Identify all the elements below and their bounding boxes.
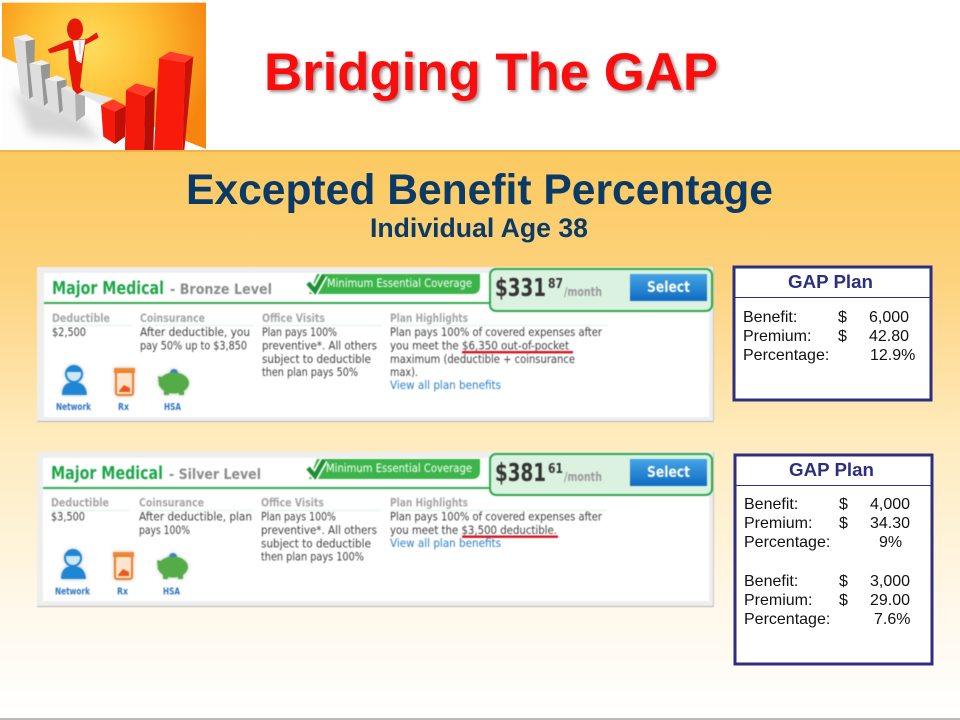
column: deductible <box>51 496 131 524</box>
premium row: 42.80 <box>869 328 909 345</box>
column: plan highlights: Plan Highlights <box>390 311 468 325</box>
column: deductible: Deductible <box>52 311 110 325</box>
title: Bridging The GAP <box>264 43 718 102</box>
column: office visits: subject to deductible <box>262 352 371 366</box>
background panel <box>0 150 960 720</box>
column: office visits: then plan pays 50% <box>262 365 358 379</box>
column: coinsurance: Coinsurance <box>139 496 204 510</box>
illustration: figure balancing across bars <box>2 3 206 150</box>
select button <box>630 459 707 486</box>
price box <box>490 454 712 495</box>
premium row: Premium: <box>743 328 811 345</box>
panel: bronze plan card <box>37 267 714 422</box>
option 2 premium row: Premium: <box>744 592 812 609</box>
option 2 benefit row: $ <box>839 573 848 590</box>
column: office visits: Plan pays 100% <box>262 325 337 339</box>
column: office visits: preventive*. All others <box>261 523 377 537</box>
benefit row: 6,000 <box>869 309 909 326</box>
icon: HSA piggy bank: HSA <box>164 402 181 413</box>
column: plan highlights: View all plan benefits <box>390 378 501 392</box>
select button: Select <box>647 278 690 296</box>
column: coinsurance <box>139 496 253 537</box>
icon: prescription bottle: Rx <box>117 586 128 598</box>
option 1 premium row: $ <box>839 515 848 532</box>
panel: GAP plan box 2: GAP Plan <box>789 459 874 480</box>
benefit row: Benefit: <box>743 309 797 326</box>
benefit row: $ <box>838 309 847 326</box>
subheading: Individual Age 38 <box>370 213 588 243</box>
column: coinsurance: After deductible, plan <box>139 510 252 524</box>
icon: prescription bottle <box>114 368 135 413</box>
panel: GAP plan box 2 <box>735 455 932 664</box>
premium row: $ <box>838 328 847 345</box>
icon: network doctor <box>55 550 91 598</box>
column: coinsurance: Coinsurance <box>140 311 205 325</box>
coverage badge: Minimum Essential Coverage <box>326 461 472 475</box>
column: plan highlights: you meet the $6,350 out-of-pocket <box>390 338 569 352</box>
plan name: - Silver Level <box>169 467 261 483</box>
option 2 benefit row <box>744 573 910 590</box>
column: plan highlights: maximum (deductible + coinsurance <box>390 352 575 366</box>
plan name: Major Medical <box>52 279 164 299</box>
column: coinsurance: pay 50% up to $3,850 <box>140 338 247 352</box>
select button: Select <box>647 463 690 481</box>
percentage row: 12.9% <box>870 347 915 364</box>
option 1 benefit row: $ <box>839 496 848 513</box>
icon: network doctor: Network <box>56 402 92 413</box>
figure <box>48 18 99 94</box>
column: office visits: subject to deductible <box>261 536 371 550</box>
price box: /month <box>564 470 602 484</box>
option 2 premium row <box>744 592 910 609</box>
option 2 premium row: $ <box>839 592 848 609</box>
plan name: - Bronze Level <box>170 282 272 298</box>
coverage badge <box>308 274 480 294</box>
column: office visits: preventive*. All others <box>262 338 377 352</box>
icon: HSA piggy bank <box>158 369 189 413</box>
icon: prescription bottle: Rx <box>118 402 129 413</box>
premium row <box>743 328 909 345</box>
column: plan highlights: Plan Highlights <box>390 496 468 510</box>
percentage row <box>743 347 915 364</box>
price box: /month <box>564 285 602 299</box>
plan name <box>51 464 261 484</box>
column: deductible <box>52 311 132 339</box>
option 2 percentage row <box>744 611 910 628</box>
column: coinsurance: pays 100% <box>139 523 190 537</box>
plan name <box>52 279 272 299</box>
option 1 premium row <box>744 515 910 532</box>
column: deductible: Deductible <box>51 496 109 510</box>
column: plan highlights: Plan pays 100% of covered expenses after <box>390 325 602 339</box>
option 2 percentage row: 7.6% <box>874 611 910 628</box>
option 1 premium row: Premium: <box>744 515 812 532</box>
panel: silver plan card <box>37 452 714 607</box>
panel: GAP plan box 1 <box>734 267 931 400</box>
column: plan highlights: View all plan benefits <box>390 536 501 550</box>
benefit row <box>743 309 909 326</box>
price box: $331 <box>495 273 546 302</box>
column: office visits: Plan pays 100% <box>261 510 336 524</box>
option 2 benefit row: Benefit: <box>744 573 798 590</box>
heading: Excepted Benefit Percentage <box>186 166 773 214</box>
column: office visits <box>261 496 381 564</box>
icon: network doctor <box>56 366 92 413</box>
icon: HSA piggy bank: HSA <box>163 586 180 598</box>
column: plan highlights <box>390 496 607 550</box>
price box: 61 <box>548 462 563 477</box>
option 2 percentage row: Percentage: <box>744 611 830 628</box>
select button <box>630 274 707 301</box>
option 1 benefit row: 4,000 <box>870 496 910 513</box>
plan name: Major Medical <box>51 464 163 484</box>
price box: 87 <box>548 277 563 292</box>
column: plan highlights <box>390 311 608 392</box>
icon: prescription bottle <box>113 552 134 598</box>
option 1 benefit row: Benefit: <box>744 496 798 513</box>
column: plan highlights: Plan pays 100% of covered expenses after <box>390 510 602 524</box>
coverage badge: Minimum Essential Coverage <box>327 276 472 290</box>
option 1 percentage row: Percentage: <box>744 534 830 551</box>
option 1 premium row: 34.30 <box>870 515 910 532</box>
column: plan highlights: max). <box>390 365 418 379</box>
icon: HSA piggy bank <box>157 553 188 598</box>
option 2 benefit row: 3,000 <box>870 573 910 590</box>
option 1 percentage row: 9% <box>879 534 902 551</box>
column: coinsurance <box>140 311 254 352</box>
column: office visits: then plan pays 100% <box>261 550 364 564</box>
icon: network doctor: Network <box>55 586 91 598</box>
coverage badge <box>308 459 480 479</box>
column: office visits <box>262 311 382 379</box>
option 1 benefit row <box>744 496 910 513</box>
price box <box>490 269 712 311</box>
price box: $381 <box>495 458 546 487</box>
percentage row: Percentage: <box>743 347 829 364</box>
column: office visits: Office Visits <box>262 311 325 325</box>
panel: GAP plan box 1: GAP Plan <box>788 271 873 292</box>
column: deductible: $2,500 <box>52 325 86 339</box>
option 2 premium row: 29.00 <box>870 592 910 609</box>
column: plan highlights: you meet the $3,500 deductible. <box>390 523 557 537</box>
option 1 percentage row <box>744 534 902 551</box>
column: deductible: $3,500 <box>51 510 85 524</box>
column: coinsurance: After deductible, you <box>140 325 250 339</box>
column: office visits: Office Visits <box>261 496 324 510</box>
